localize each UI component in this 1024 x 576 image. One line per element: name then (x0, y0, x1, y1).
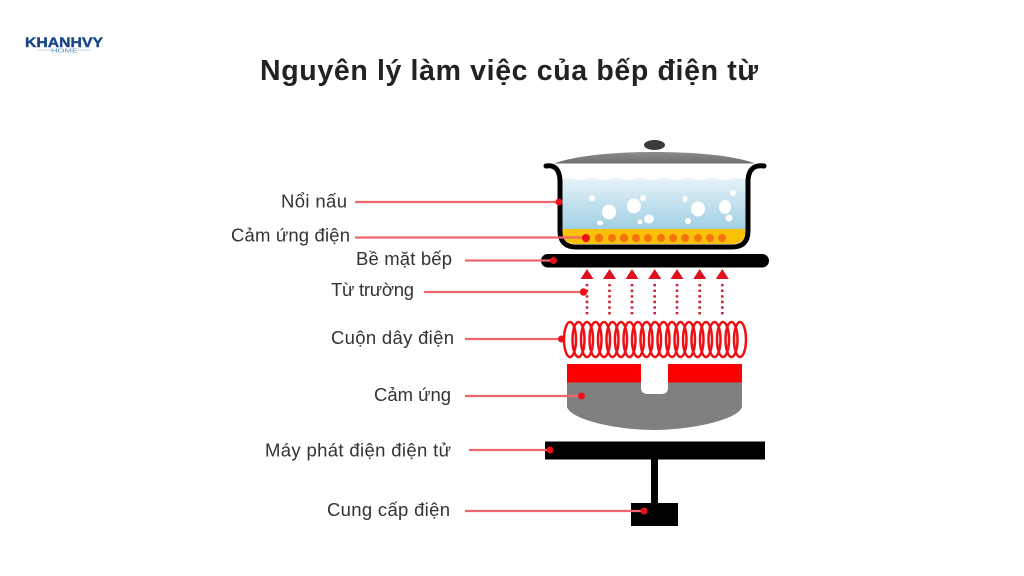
label: power supply: Cung cấp điện (327, 499, 450, 520)
magnetic field arrows (580, 269, 729, 316)
bubbles (589, 190, 736, 226)
induction coil (564, 322, 746, 357)
label: coil: Cuộn dây điện (331, 327, 454, 348)
label: induced current: Cảm ứng điện (231, 224, 350, 246)
electronic generator bar (545, 442, 765, 460)
pot lid (554, 140, 755, 164)
label: induced current (231, 224, 590, 246)
label: induction: Cảm ứng (374, 384, 451, 405)
label: cooktop surface (356, 248, 557, 269)
icon: cooking pot (546, 140, 764, 247)
label: electronic generator (265, 440, 554, 460)
logo: Khanhvy Home: KHANHVY (25, 34, 104, 50)
label: induction (374, 384, 585, 405)
induced heat layer (562, 229, 746, 244)
label: cooktop surface: Bề mặt bếp (356, 248, 452, 269)
logo: Khanhvy Home (25, 34, 104, 54)
heat dots (595, 234, 726, 242)
label: coil (331, 327, 565, 348)
label: pot (281, 190, 562, 212)
label: magnetic field: Từ trường (331, 279, 414, 300)
label: power supply (327, 499, 648, 520)
power supply (631, 459, 678, 526)
induction core (567, 364, 742, 430)
cooktop surface (541, 254, 769, 268)
title: Nguyên lý làm việc của bếp điện từ (260, 55, 758, 87)
label: electronic generator: Máy phát điện điện tử (265, 440, 451, 460)
logo: Khanhvy Home: HOME (51, 48, 79, 54)
pot body (546, 166, 764, 247)
water (562, 178, 746, 230)
label: pot: Nổi nấu (281, 190, 347, 212)
label: magnetic field (331, 279, 587, 300)
